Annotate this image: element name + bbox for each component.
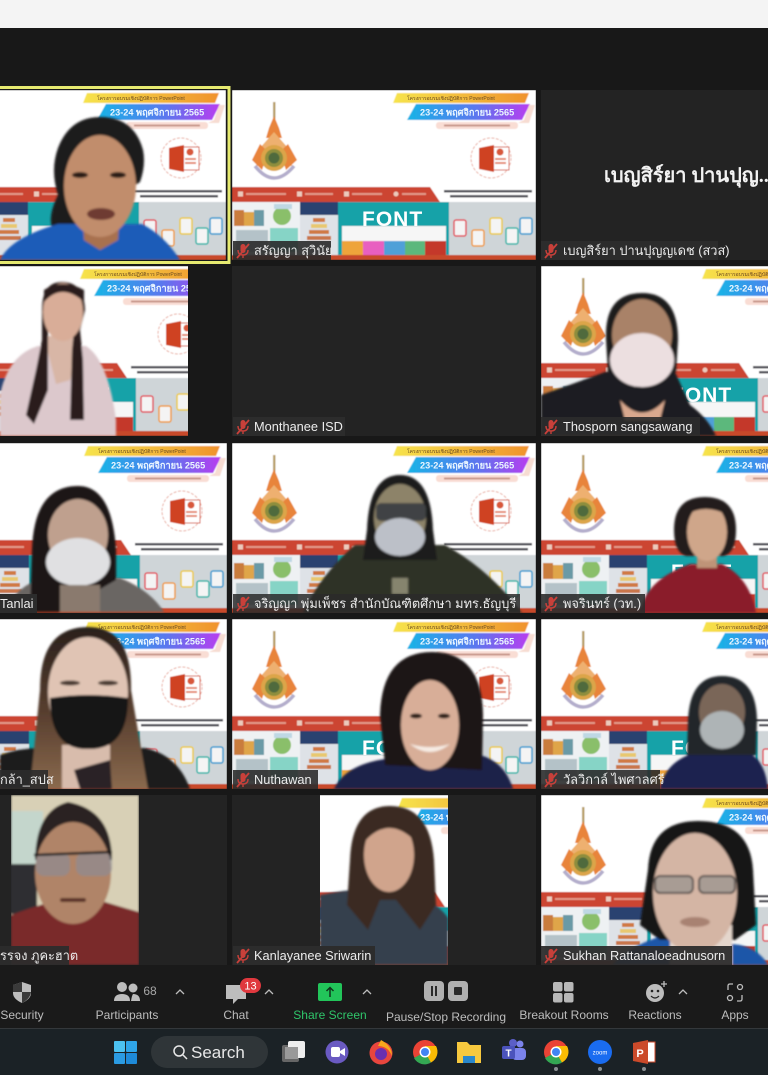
person: presenter [0, 117, 180, 260]
tile: สรัญญา สุวินัย [232, 90, 536, 260]
tile: active speaker presenter: FONT [52, 208, 113, 231]
person: Sukhan [612, 821, 768, 965]
chat badge 13: 13 [244, 980, 257, 992]
person: วัลวิกาล์ [660, 676, 768, 789]
control: Pause/Stop Recording [386, 981, 506, 1024]
control: Share Screen [293, 983, 371, 1022]
person: Tanlai [6, 486, 164, 612]
tile: Thosporn sangsawang: FONT [671, 384, 732, 407]
tile: สรัญญา สุวินัย: โครงการอบรมเชิงปฏิบัติการ PowerPoint [407, 95, 495, 102]
icon: powerpoint [633, 1040, 655, 1071]
windows taskbar [0, 1028, 768, 1075]
person: พจรินทร์ [640, 497, 756, 613]
control: Reactions [628, 981, 687, 1022]
tile: กล้า สปส [0, 619, 227, 789]
tile: กล้า สปส: โครงการอบรมเชิงปฏิบัติการ PowerPoint [98, 624, 186, 631]
control: Share Screen: Share Screen [293, 1008, 367, 1022]
tile: พจรินทร์: FONT [671, 561, 732, 584]
tile: Nuthawan: โครงการอบรมเชิงปฏิบัติการ PowerPoint [407, 624, 495, 631]
tile: name-only participant เบญสิร์ยา [541, 90, 768, 260]
name label: Nuthawan [233, 770, 318, 789]
tile: woman in pink blouse [0, 266, 188, 436]
tile: active speaker presenter [0, 88, 229, 262]
tile: Nuthawan: 23-24 พฤศจิกายน 2565 [420, 636, 514, 646]
person: Thosporn [541, 293, 716, 436]
name label: Sukhan: Sukhan Rattanaloeadnusorn [563, 948, 725, 963]
control: Security [0, 982, 44, 1022]
control: Apps: Apps [721, 1008, 749, 1022]
name label: พจรินทร์: พจรินทร์ (วท.) [563, 596, 641, 611]
display name: เบญสิร์ยา ปานปุญ.. [604, 164, 768, 188]
tile: Kanlayanee Sriwarin [232, 795, 541, 965]
tile: กล้า สปส: FONT [53, 737, 114, 760]
tile: จริญญา พุ่มเพ็ชร [232, 443, 536, 613]
icon: meet [326, 1040, 348, 1064]
active speaker border [0, 88, 229, 262]
name label: กล้า สปส: กล้า_สปส [0, 772, 54, 787]
tile: woman in pink blouse: 23-24 พฤศจิกายน 2565 [107, 284, 201, 294]
name label: Kanlayanee: Kanlayanee Sriwarin [254, 948, 371, 963]
control: Breakout Rooms: Breakout Rooms [519, 1008, 609, 1022]
icon: teams: T [505, 1048, 512, 1060]
icon: powerpoint: P [636, 1048, 644, 1060]
control: Participants: Participants [96, 1008, 158, 1022]
control: Apps [721, 984, 749, 1022]
icon: zoom app: zoom [593, 1050, 607, 1056]
control: Chat: Chat [223, 1008, 249, 1022]
icon: firefox [370, 1040, 392, 1064]
tile: Nuthawan: FONT [362, 737, 423, 760]
control: Participants [96, 982, 184, 1022]
top white band [0, 0, 768, 28]
name label: เบญสิร์ยา [541, 241, 730, 260]
tile: Monthanee ISD [232, 266, 536, 436]
name label: Sukhan [541, 946, 732, 965]
name label: วัลวิกาล์ [541, 770, 665, 789]
zoom toolbar [0, 965, 768, 1028]
person: Kanlayanee [320, 806, 448, 965]
name label: Nuthawan: Nuthawan [254, 772, 312, 787]
name label: พจรินทร์ [541, 594, 645, 613]
tile: จริญญา พุ่มเพ็ชร: FONT [362, 561, 423, 584]
search box [151, 1036, 268, 1068]
tile: man with glasses [0, 795, 227, 965]
tile: Sukhan Rattanaloeadnusorn [541, 795, 768, 965]
control: Reactions: Reactions [628, 1008, 682, 1022]
icon: file explorer [457, 1042, 481, 1063]
name label: สรัญญา สุวินัย: สรัญญา สุวินัย [254, 243, 332, 259]
icon: zoom app [588, 1040, 612, 1071]
control: Participants: 68 [143, 984, 157, 998]
name label: รรจง ภูคะฮาต: รรจง ภูคะฮาต [0, 948, 78, 964]
tile: Sukhan Rattanaloeadnusorn: FONT [671, 913, 732, 936]
tile: พจรินทร์ [541, 443, 768, 613]
tile: woman in pink blouse: โครงการอบรมเชิงปฏิบัติการ PowerPoint [94, 271, 182, 278]
search box: Search [191, 1043, 245, 1062]
tile: วัลวิกาล์ ไพศาลศรี: FONT [671, 737, 732, 760]
icon: windows start [114, 1041, 137, 1064]
name label: Monthanee ISD: Monthanee ISD [254, 419, 343, 434]
person: Nuthawan [334, 652, 513, 789]
person: woman in pink [0, 282, 116, 436]
name label: Thosporn [541, 417, 700, 436]
control: Breakout Rooms [519, 982, 609, 1022]
name label: สรัญญา สุวินัย [233, 241, 332, 260]
tile: Thosporn sangsawang [541, 266, 768, 436]
tile: Tanlai: FONT [53, 561, 114, 584]
person photo: man with glasses [11, 795, 139, 965]
tile: จริญญา พุ่มเพ็ชร: 23-24 พฤศจิกายน 2565 [420, 460, 514, 470]
control: Chat [223, 978, 273, 1022]
tile: Kanlayanee Sriwarin: 23-24 พฤศจิกายน 2565 [420, 812, 514, 822]
tile: Tanlai: โครงการอบรมเชิงปฏิบัติการ PowerPoint [98, 448, 186, 455]
icon: chrome pinned [544, 1040, 569, 1071]
name label: Thosporn: Thosporn sangsawang [563, 419, 692, 434]
name label: Monthanee ISD [233, 417, 345, 436]
name label: จริญญา: จริญญา พุ่มเพ็ชร สำนักบัณฑิตศึกษา มทร.ธัญบุรี [254, 595, 516, 612]
tile: Tanlai: 23-24 พฤศจิกายน 2565 [111, 460, 205, 470]
icon: chrome [413, 1040, 438, 1064]
name label: Kanlayanee [233, 946, 375, 965]
tile: active speaker presenter: 23-24 พฤศจิกายน 2565 [110, 108, 204, 118]
icon: task view [282, 1041, 305, 1062]
control: Security: Security [0, 1008, 44, 1022]
tile: Nuthawan [232, 619, 536, 789]
tile: woman in pink blouse: FONT [49, 384, 110, 407]
name label: วัลวิกาล์: วัลวิกาล์ ไพศาลศรี [563, 772, 665, 787]
control: Pause/Stop Recording: Pause/Stop Recording [386, 1010, 506, 1024]
tile: จริญญา พุ่มเพ็ชร: โครงการอบรมเชิงปฏิบัติการ PowerPoint [407, 448, 495, 455]
tile: Tanlai [0, 443, 227, 613]
person: กล้า สปส [0, 627, 190, 789]
person: จริญญา [303, 475, 522, 613]
tile: สรัญญา สุวินัย: 23-24 พฤศจิกายน 2565 [420, 108, 514, 118]
name label: Tanlai: Tanlai [0, 596, 33, 611]
tile: วัลวิกาล์ ไพศาลศรี [541, 619, 768, 789]
icon: teams [502, 1039, 526, 1060]
tile: สรัญญา สุวินัย: FONT [362, 208, 423, 231]
tile: กล้า สปส: 23-24 พฤศจิกายน 2565 [111, 636, 205, 646]
name label: เบญสิร์ยา: เบญสิร์ยา ปานปุญญเดช (สวส) [563, 243, 730, 259]
tile: active speaker presenter: โครงการอบรมเชิงปฏิบัติการ PowerPoint [97, 95, 185, 102]
